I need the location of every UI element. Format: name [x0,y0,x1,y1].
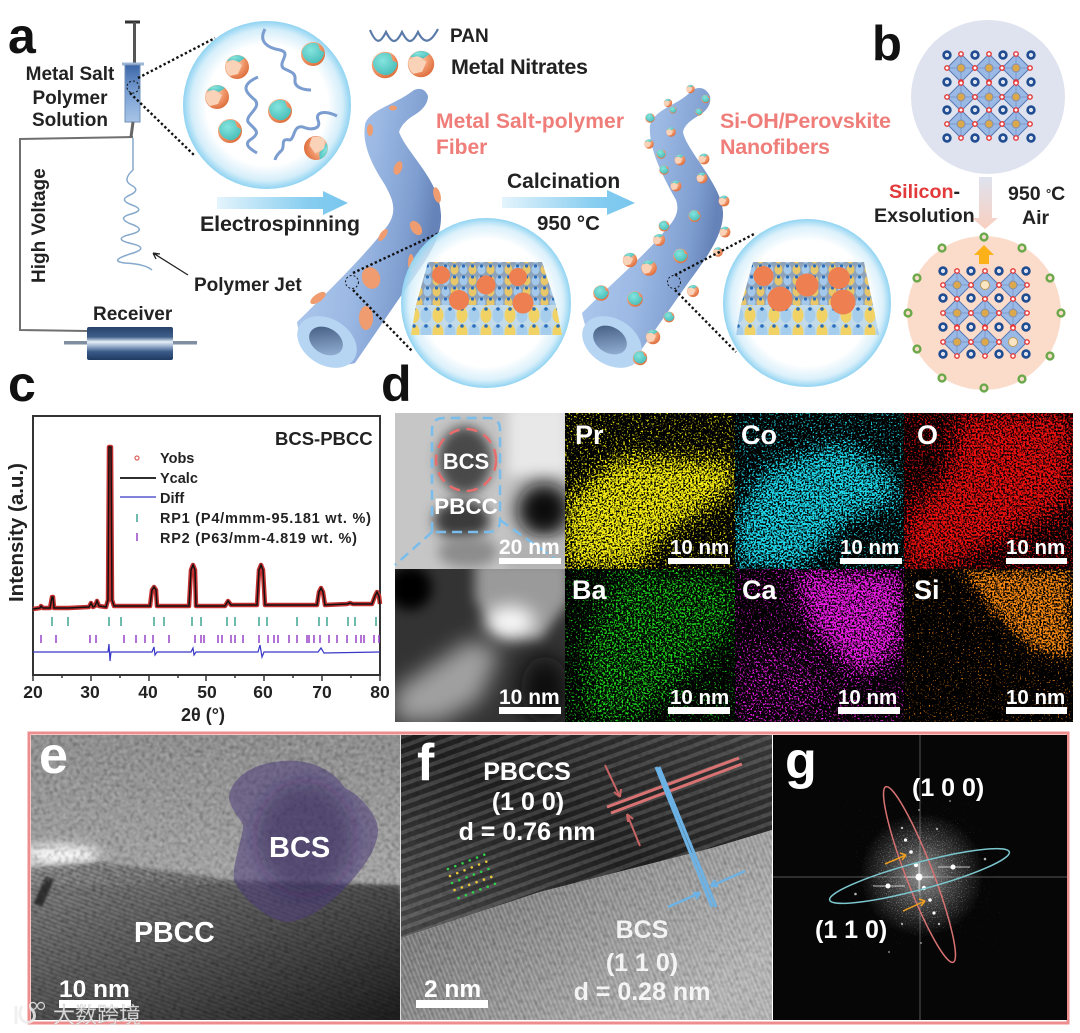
label PBCC: PBCC [134,917,215,949]
legend [120,451,371,547]
panel d: STEM and EDS maps [381,356,1073,724]
legend: RP1 (P4/mmm-95.181 wt. %) [160,511,371,527]
series: Diff [33,644,380,661]
icon: receiver drum [64,327,197,360]
label: electrospinning: Electrospinning [200,212,360,236]
dotted zoom lines fiber 2 [675,233,756,352]
label: si-oh/perovskite nanofibers: Si-OH/Perovskite [720,109,891,133]
label PBCCS plane [459,758,595,846]
plot frame [33,416,380,675]
frame background [29,733,1068,1023]
EDS map Ba: 10 nm [670,686,729,709]
panel f: HRTEM lattice image [401,735,772,1020]
series: RP1 tick marks [52,617,376,626]
legend: Ycalc [160,471,198,487]
label PBCCS plane: d = 0.76 nm [459,818,595,846]
cyan ellipse (1 1 0) [828,848,1010,904]
blue lattice spacing lines [656,767,716,907]
dashed selection box [395,418,565,566]
legend: Yobs [160,451,194,467]
x axis labels: 40 [138,682,158,702]
label: metal salt-polymer fiber: Metal Salt-polymer [436,110,624,133]
dotted zoom lines from syringe [130,38,215,156]
panel letter c: c [8,356,36,412]
label: 950 C air: C [1051,183,1065,205]
EDS map Ba [565,569,735,722]
panel letter f: f [417,734,435,792]
circle: exsolved lattice [905,234,1064,391]
x axis labels: 80 [370,682,390,702]
label: silicon-exsolution [874,181,975,227]
panel letter e: e [39,727,68,785]
EDS map O: 10 nm [1006,536,1065,559]
label: metal salt polymer solution: Metal Salt [26,64,115,85]
label: metal salt polymer solution: Solution [32,110,108,131]
EDS map Ca: Ca [742,575,777,605]
pink ellipse (1 0 0) [882,786,956,964]
label PBCCS plane: (1 0 0) [492,788,564,816]
legend: metal nitrates: Metal Nitrates [451,55,588,79]
FFT speckle [867,820,977,930]
EDS map Pr [565,413,735,569]
atomic dot overlay [448,854,497,898]
panel letter b: b [872,17,902,71]
bubble: fiber surface zoom 1 [401,218,571,388]
series: RP2 tick marks [41,635,379,643]
panel c: XRD refinement chart [5,356,390,725]
bubble: solution zoom [183,21,351,189]
EDS map Pr: Pr [575,420,604,450]
EDS map Co [735,413,904,569]
label: 950 C air: 950 [1008,183,1041,205]
STEM image bottom [395,569,565,722]
label: silicon-exsolution: Exsolution [874,205,975,227]
dotted zoom lines fiber 1 [353,233,439,352]
series: Yobs [33,447,380,609]
watermark: 大数跨境 [53,1003,141,1028]
EDS map Si: Si [914,575,940,605]
wire: high voltage circuit [20,137,133,331]
panel letter g: g [785,732,817,790]
panel g: FFT pattern [773,735,1067,1020]
y axis title: Intensity (a.u.) [5,463,28,602]
STEM image top [395,405,571,572]
label BCS: BCS [443,449,489,474]
label PBCCS plane: PBCCS [483,758,571,786]
EDS map Ca: 10 nm [838,686,897,709]
fiber 1: metal salt-polymer fiber [288,89,442,378]
EDS map Co: Co [741,420,777,450]
x axis labels: 30 [80,682,100,702]
legend: PAN: PAN [450,26,489,47]
chart label BCS-PBCC: BCS-PBCC [275,428,373,449]
polymer jet spiral [118,138,152,270]
scale bar stem 10 nm: 10 nm [499,686,560,709]
FFT halo [865,818,979,932]
panel letter a: a [8,8,37,64]
label: high voltage: High Voltage [29,168,50,283]
x axis labels: 50 [197,682,217,702]
label (1 0 0): (1 0 0) [912,774,984,802]
EDS map O: O [917,420,938,450]
label BCS: BCS [269,832,330,864]
series: Ycalc [33,447,380,609]
arrow: to polymer jet [153,253,188,275]
label BCS plane: (1 1 0) [606,949,678,977]
arrow: yellow exsolving [974,245,994,264]
EDS map Ba: Ba [572,575,607,605]
label: 950 C air: Air [1022,207,1050,229]
x axis ticks [33,675,380,681]
EDS map Ca [735,569,904,722]
arrow: exsolution down [972,177,998,229]
label: metal salt-polymer fiber: Fiber [436,136,487,159]
label: calcination 950 C [507,170,620,235]
EDS map O [904,413,1073,569]
EDS map Si [904,569,1073,722]
label: polymer jet: Polymer Jet [194,275,302,296]
marker circle fiber 1 [346,276,358,288]
panel a: electrospinning schematic [8,8,891,388]
label: metal salt polymer solution [26,64,115,131]
label BCS plane: d = 0.28 nm [574,978,710,1006]
EDS map Co: 10 nm [840,536,899,559]
label: si-oh/perovskite nanofibers: Nanofibers [720,135,830,159]
scale bar 2 nm [416,976,488,1008]
icon: syringe [122,22,144,137]
panel e: TEM image [31,735,400,1020]
panel e-g: HRTEM frame [20,727,1068,1033]
x axis labels: 60 [253,682,273,702]
label: silicon-exsolution: Silicon- [889,181,960,203]
pink arrows [605,765,640,846]
label: metal salt polymer solution: Polymer [33,88,108,109]
arrow: calcination [502,190,635,215]
bubble: fiber surface zoom 2 [723,219,891,387]
label: metal salt-polymer fiber [436,110,624,159]
pink lattice spacing lines [607,758,742,813]
BCS particle core shading [257,783,353,893]
watermark [16,1002,141,1028]
panel b: silicon exsolution schematic [872,17,1065,391]
BCS particle overlay [229,761,378,922]
dashed BCS ellipse [436,429,496,491]
EDS map Si: 10 nm [1006,686,1065,709]
label: 950 C air [1008,183,1065,229]
x axis title: 2θ (°) [181,705,225,725]
x axis labels: 70 [312,682,332,702]
label: 950 C air: ° [1046,186,1051,201]
x axis labels [23,682,390,702]
legend: PAN [370,26,489,47]
panel letter d: d [381,356,412,412]
divider between e and f [400,735,402,1020]
x axis labels: 20 [23,682,43,702]
label: receiver: Receiver [93,304,173,325]
FFT crosshair [773,735,1067,1020]
label: calcination 950 C: 950 °C [537,212,600,235]
scale bar 10 nm: 10 nm [59,976,130,1003]
legend: Diff [160,491,184,507]
fiber 2: perovskite nanofibers [573,85,730,378]
diffraction spots [854,800,986,953]
label: si-oh/perovskite nanofibers [720,109,891,159]
label: calcination 950 C: Calcination [507,170,620,193]
orange arrows [885,853,925,911]
label (1 1 0): (1 1 0) [815,916,887,944]
scale bar 20 nm: 20 nm [499,536,560,559]
legend: metal nitrates [372,51,588,79]
blue arrows [668,871,745,907]
arrow: electrospinning [217,191,348,215]
scale bar 2 nm: 2 nm [424,976,481,1003]
label BCS plane: BCS [616,916,668,944]
legend: RP2 (P63/mm-4.819 wt. %) [160,531,357,547]
label PBCC: PBCC [434,494,498,519]
EDS map Pr: 10 nm [670,536,729,559]
label BCS plane [574,916,710,1006]
circle: pristine perovskite lattice [911,20,1065,174]
marker circle fiber 2 [668,276,680,288]
